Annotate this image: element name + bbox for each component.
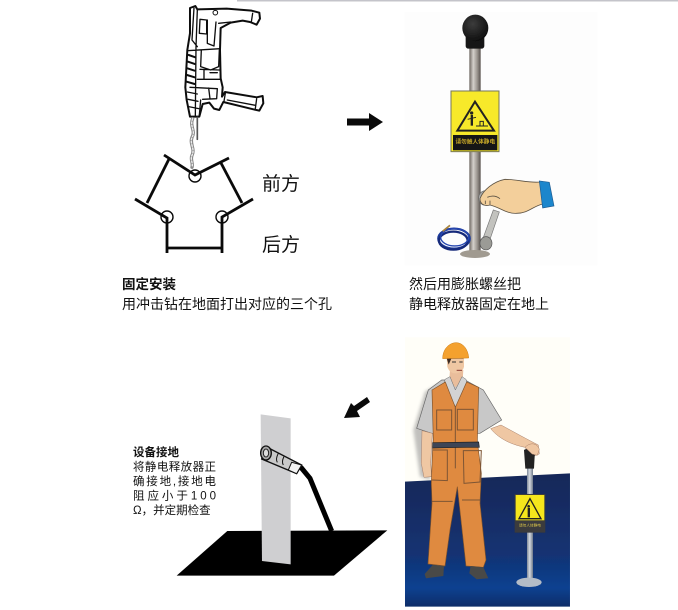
discharger (515, 449, 545, 587)
text: step two body: 然后用膨胀螺丝把 (409, 276, 521, 292)
neck (449, 370, 463, 387)
text: step two body: 静电释放器固定在地上 (409, 296, 549, 312)
grey post (261, 414, 291, 564)
hand (480, 179, 543, 213)
navy floor (405, 473, 570, 607)
collar (443, 377, 468, 407)
text: grounding note: Ω，并定期检查 (133, 503, 211, 517)
panel: worker beside discharger (405, 337, 570, 607)
icon: black ball handle (462, 15, 488, 49)
text: grounding note: 确接地,接地电 (133, 475, 216, 488)
boots (425, 565, 444, 578)
arrow: pointing down-left (344, 397, 370, 418)
top edge line (237, 0, 678, 2)
left arm (421, 431, 432, 477)
right arm (491, 425, 539, 457)
panel: discharger with wrench (405, 12, 597, 265)
text: step one heading: 固定安装 (122, 276, 176, 292)
cream wall (405, 337, 570, 482)
head (447, 357, 464, 373)
text: grounding note: 将静电释放器正 (133, 460, 216, 474)
hard hat (443, 343, 469, 359)
shirt (417, 380, 502, 433)
vest and trousers (428, 382, 486, 567)
finger lines (485, 196, 500, 205)
belt (433, 442, 479, 448)
label: front: 前方 (262, 173, 300, 195)
pole (469, 47, 481, 255)
ground cable (301, 467, 332, 531)
pockets (432, 407, 481, 501)
base plate (460, 250, 490, 258)
worker (417, 343, 539, 579)
icon: hammer drill (185, 6, 263, 167)
worker shadow (413, 383, 439, 480)
arrow: right (347, 113, 383, 131)
hand on handle (525, 444, 539, 455)
text: grounding note: 阻应小于100 (133, 488, 216, 502)
coiled blue cable (438, 225, 470, 250)
text: grounding note: 设备接地 (133, 445, 179, 459)
text: step one body: 用冲击钻在地面打出对应的三个孔 (122, 296, 332, 312)
icon: drill holes (161, 170, 228, 223)
blue cuff (539, 181, 554, 208)
text: grounding note (133, 445, 216, 517)
cable clamp (261, 446, 302, 474)
text: step two body (409, 276, 549, 312)
wrench (479, 191, 499, 250)
panel: grounding illustration (177, 414, 387, 576)
warning sign: 请勿触人体静电 (456, 138, 495, 146)
warning sign (451, 91, 499, 152)
small warning sign: 请勿人体静电 (519, 523, 541, 528)
label: rear: 后方 (262, 234, 300, 256)
diagram: mounting base outline with three holes (135, 155, 253, 253)
black ground plane (177, 530, 387, 576)
